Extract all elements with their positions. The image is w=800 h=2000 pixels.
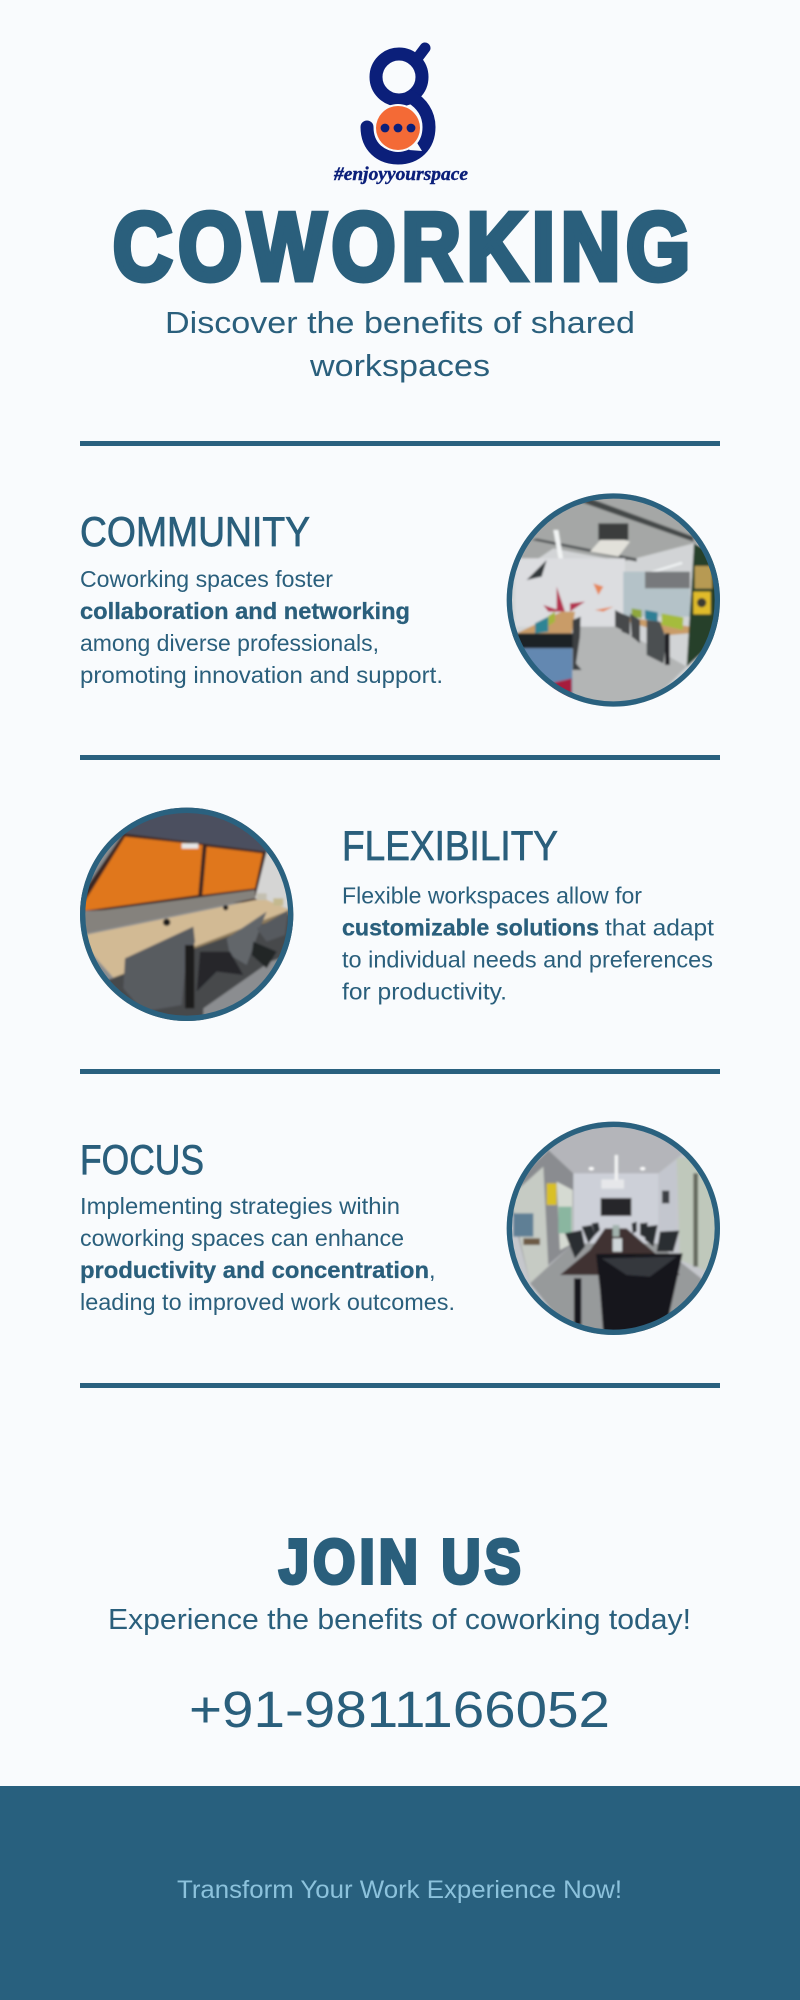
photo: open office — [506, 493, 720, 707]
text block: community — [80, 566, 443, 688]
text block: flexibility: to individual needs and preferences — [342, 946, 713, 972]
phone number: +91-9811166052 — [189, 1681, 610, 1738]
heading: join us: JOIN US — [279, 1528, 525, 1597]
text block: community: collaboration and networking — [80, 598, 410, 624]
text block: focus: Implementing strategies within — [80, 1193, 400, 1219]
text block: focus: , — [429, 1257, 436, 1283]
text block: flexibility: that adapt — [605, 914, 714, 940]
text block: flexibility: customizable solutions — [342, 914, 599, 940]
text block: focus: leading to improved work outcomes. — [80, 1289, 455, 1315]
text block: community: Coworking spaces foster — [80, 566, 333, 592]
text block: flexibility: for productivity. — [342, 978, 507, 1004]
panel: focus — [81, 1122, 720, 1335]
photo: meeting room — [506, 1122, 720, 1335]
footer text: Transform Your Work Experience Now! — [177, 1876, 622, 1904]
icon: letter g — [367, 48, 429, 158]
panel: community — [80, 493, 720, 707]
heading: community: COMMUNITY — [80, 508, 310, 555]
text block: flexibility — [342, 882, 714, 1004]
photo: desks with orange panels — [80, 808, 294, 1021]
heading: focus: FOCUS — [80, 1136, 204, 1183]
subtitle: Discover the benefits of shared — [165, 305, 635, 340]
call to action text: Experience the benefits of coworking today! — [108, 1604, 691, 1636]
subtitle — [165, 305, 635, 383]
heading: flexibility: FLEXIBILITY — [342, 822, 558, 869]
logo tagline: #enjoyyourspace — [333, 164, 469, 185]
text block: focus: productivity and concentration — [80, 1257, 429, 1283]
text block: focus — [80, 1193, 455, 1315]
text block: focus: coworking spaces can enhance — [80, 1225, 404, 1251]
text block: flexibility: Flexible workspaces allow for — [342, 882, 642, 908]
text block: community: promoting innovation and support. — [80, 662, 443, 688]
icon: speech bubble — [374, 104, 422, 152]
panel: flexibility — [80, 808, 714, 1021]
logo — [333, 48, 469, 185]
title: COWORKING — [113, 194, 696, 300]
text block: community: among diverse professionals, — [80, 630, 379, 656]
footer band — [0, 1786, 800, 2000]
subtitle: workspaces — [309, 348, 490, 383]
